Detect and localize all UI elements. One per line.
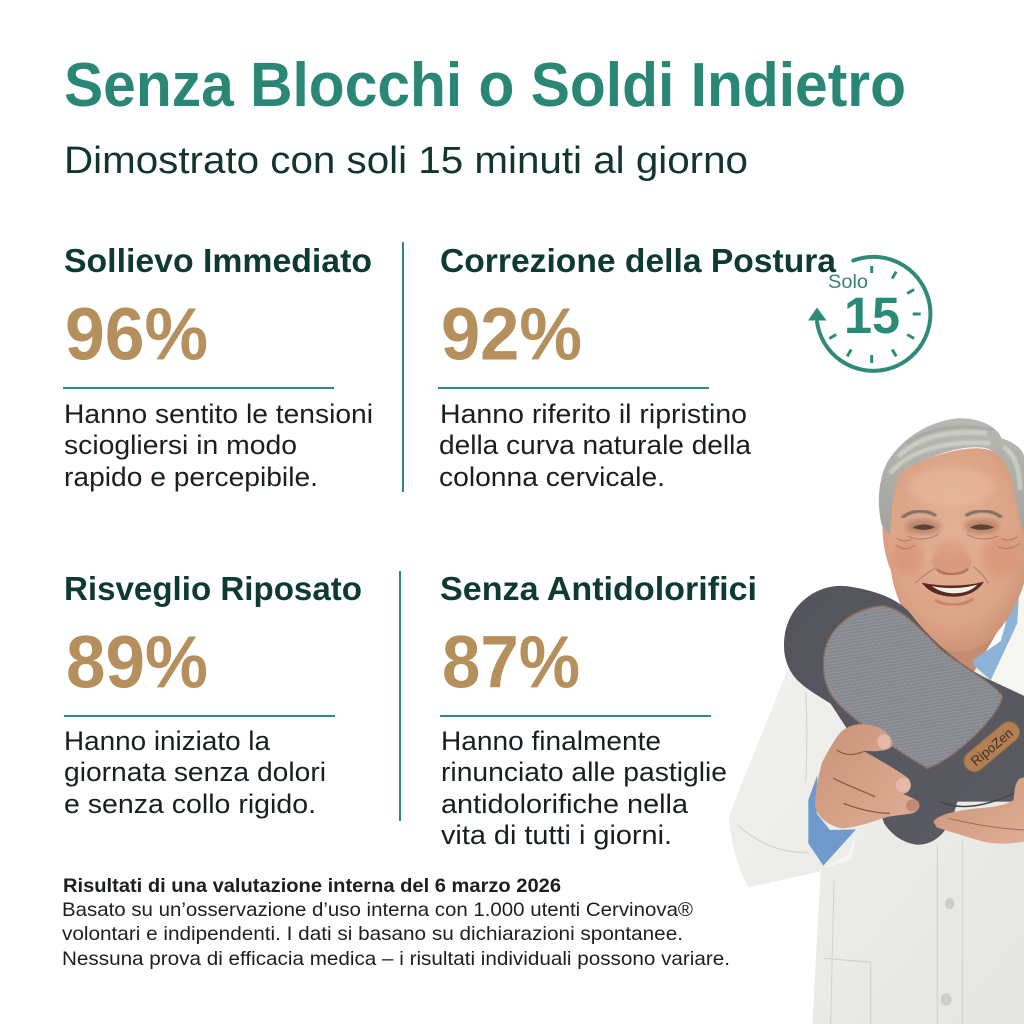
- coat buttons: [941, 898, 954, 1006]
- text: risveglio description: [64, 726, 326, 819]
- text: sollievo description: sciogliersi in modo: [64, 430, 297, 460]
- text: postura description: Hanno riferito il ripristino: [440, 399, 747, 429]
- heading: correzione della postura: Correzione della Postura: [440, 242, 837, 279]
- crow's feet and lids: [896, 534, 1020, 583]
- face: [883, 448, 1024, 652]
- text: antidolorifici description: [441, 726, 727, 850]
- stat: 89%: 89%: [66, 620, 208, 704]
- footnote: Basato su un’osservazione d’uso interna con 1.000 utenti Cervinova®: [62, 899, 694, 921]
- heading: senza antidolorifici: Senza Antidolorifici: [440, 570, 757, 607]
- stat: 96%: 96%: [65, 292, 208, 376]
- eyebrows: [903, 511, 1001, 517]
- stat: 92%: 92%: [441, 292, 582, 376]
- panel: sollievo immediato: [63, 242, 373, 492]
- title: Senza Blocchi o Soldi Indietro: [64, 51, 906, 120]
- text: antidolorifici description: antidolorifiche nella: [441, 789, 689, 819]
- head: [879, 418, 1024, 652]
- text: antidolorifici description: rinunciato alle pastiglie: [441, 757, 727, 787]
- panel: correzione della postura: [438, 242, 837, 492]
- heading: sollievo immediato: Sollievo Immediato: [64, 242, 372, 279]
- hair strands: [890, 432, 1020, 490]
- heading: risveglio riposato: Risveglio Riposato: [64, 570, 362, 607]
- finger creases: [833, 750, 890, 813]
- shirt collar: [972, 593, 1019, 680]
- panel: risveglio riposato: [64, 570, 362, 819]
- text: sollievo description: rapido e percepibile.: [64, 462, 318, 492]
- nose: [932, 553, 972, 575]
- text: risveglio description: e senza collo rigido.: [64, 789, 316, 819]
- right hand: [933, 777, 1024, 844]
- icon: solo 15 timer: Solo: [828, 272, 868, 293]
- text: risveglio description: giornata senza dolori: [64, 757, 326, 787]
- text: antidolorifici description: Hanno finalmente: [441, 726, 661, 756]
- illustration: smiling doctor holding pillow: [729, 418, 1024, 1024]
- footnote: volontari e indipendenti. I dati si basano su dichiarazioni spontanee.: [62, 923, 683, 945]
- hands: [808, 724, 1024, 868]
- eye sockets: [906, 519, 941, 534]
- smile: [922, 582, 984, 597]
- left hand: [815, 724, 919, 828]
- footnote: Nessuna prova di efficacia medica – i risultati individuali possono variare.: [62, 948, 730, 970]
- text: postura description: [439, 399, 752, 492]
- icon: solo 15 timer: [808, 257, 930, 371]
- footnote: [62, 875, 730, 970]
- lab coat and torso: [729, 586, 1024, 1024]
- eyes: [913, 524, 994, 530]
- panel: senza antidolorifici: [440, 570, 757, 850]
- pillow fabric: [823, 606, 1002, 768]
- footnote: Risultati di una valutazione interna del 6 marzo 2026: [63, 875, 561, 897]
- icon: solo 15 timer: 15: [844, 287, 900, 344]
- hair: [879, 418, 1024, 535]
- shirt cuff: [808, 775, 856, 866]
- pillow label: [960, 717, 1024, 776]
- subtitle: Dimostrato con soli 15 minuti al giorno: [64, 140, 748, 182]
- cheek colour: [893, 538, 923, 575]
- text: postura description: colonna cervicale.: [439, 462, 665, 492]
- text: sollievo description: [64, 399, 373, 492]
- finger nails: [877, 734, 919, 811]
- neck: [911, 598, 1017, 672]
- pillow label: RipoZen: [968, 725, 1016, 769]
- text: postura description: della curva naturale della: [439, 430, 752, 460]
- stat: 87%: 87%: [442, 620, 580, 704]
- text: risveglio description: Hanno iniziato la: [64, 726, 271, 756]
- pillow: [784, 586, 1024, 845]
- text: sollievo description: Hanno sentito le tensioni: [64, 399, 373, 429]
- text: antidolorifici description: vita di tutti i giorni.: [441, 820, 672, 850]
